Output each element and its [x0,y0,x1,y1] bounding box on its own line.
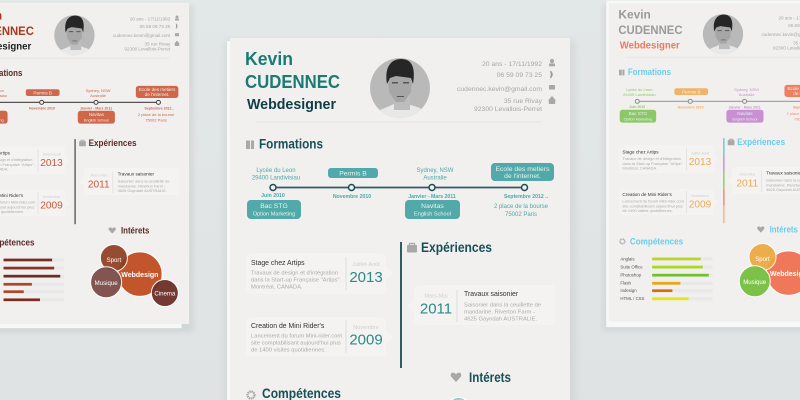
experience card: Mini Rider's: de 1400 visites quotidiennes. [622,208,673,213]
experience card: Stage chez Artips: 2013 [40,158,63,169]
experience card: Stage chez Artips: 2013 [349,269,383,286]
heading: Compétences: Compétences [630,236,683,247]
heading: Formations: Formations [628,67,671,78]
experience card: Stage chez Artips: Montréal, CANADA. [622,166,657,171]
experience card: Travaux saisonier: mandarine. Riverton Farm - [464,310,535,316]
heading: Intérets: Intérets [469,369,511,385]
portrait photo [370,58,430,120]
experience card: Travaux saisonier: Saisonier dans la ceuillette de [118,179,170,184]
contact details: 92300 Levallois-Perret [124,47,171,52]
skill bars: Flash [620,281,632,286]
timeline: 2 place de la bourse [494,204,549,210]
heading: Intérets [757,225,798,236]
experience card: Travaux saisonier: 4625 Gayndah AUSTRALIE. [118,188,167,193]
experience card: Stage chez Artips: Juillet-Août [691,151,710,155]
timeline: 75002 Paris [145,118,167,123]
experience card: Mini Rider's: Creation de Mini Rider's [251,323,325,330]
timeline: Novembre 2010 [29,106,55,110]
experience card: Stage chez Artips: dans la Start-up Française "Artips". [251,278,342,284]
experience card: Travaux saisonier: 4625 Gayndah AUSTRALIE. [464,316,538,322]
experience card: Mini Rider's: Novembre [691,194,709,198]
skill bars: Photoshop [620,273,642,278]
timeline: Juin 2010 [629,105,645,109]
experience card: Stage chez Artips: Travaux de design et d'intégration [251,270,338,276]
vertical divider [74,139,76,224]
timeline: Ecole des metiers [139,87,176,92]
contact details: cudennec.kevin@gmail.com [457,86,542,93]
skill bars: Suite Office [620,264,643,269]
timeline: Sydney, NSW [86,88,111,93]
heading: Formations: Formations [259,136,323,152]
contact details: 20 ans - 17/11/1992 [482,61,542,68]
timeline: Permis B [33,90,52,95]
interests bubble chart: Cinema [154,292,176,298]
name heading [618,8,683,51]
experience card: Stage chez Artips [0,147,70,174]
contact details: 35 rue Rivay [145,41,171,46]
interests bubble chart: Webdesign [121,270,159,279]
timeline: Janvier - Mars 2011 [408,194,456,200]
vertical divider [400,242,402,368]
name heading: Webdesigner [247,96,336,113]
panel: right CV in multicolour theme [603,0,800,331]
experience card: Travaux saisonier: 2011 [736,178,759,189]
timeline: English School [414,212,451,218]
experience card: Mini Rider's: Novembre [353,325,379,331]
timeline: Navitas [89,112,105,117]
skill bars: HTML / CSS [620,296,645,301]
interests bubble chart [91,244,178,307]
interests bubble chart: Sport [107,258,121,264]
timeline: 2 place de la bourse [138,112,175,117]
interests bubble chart: Musique [743,280,767,286]
experience card: Stage chez Artips: Juillet-Août [352,262,380,268]
name heading [0,9,34,52]
experience card: Travaux saisonier [79,168,179,195]
experience card: Stage chez Artips [246,253,394,294]
experience card: Stage chez Artips: Montréal, CANADA. [251,284,303,290]
heading: Intérets: Intérets [121,226,149,237]
name heading: Kevin [245,49,293,69]
timeline: Option Marketing [253,212,295,218]
experience card: Travaux saisonier: 2011 [420,300,452,318]
interests bubble chart [739,243,800,297]
timeline: Ecole des metiers [495,166,550,173]
timeline: Sydney, NSW [734,87,759,92]
panel: centre CV in teal theme [224,38,576,400]
experience card: Mini Rider's: Novembre [43,195,60,199]
skill bars: Anglais [620,256,635,261]
timeline: Lycée du Leon [256,168,296,174]
experience card: Mini Rider's: 2009 [40,200,63,211]
skill bars [0,257,64,302]
timeline: Lycée du Leon [626,87,653,92]
skill bars: Indesign [620,288,637,293]
timeline: de l'internet. [145,92,169,97]
experience card: Mini Rider's: site comptabilisant aujourd'hui plus [251,340,341,346]
multicolour vertical divider [723,138,725,223]
portrait photo [54,15,95,57]
timeline: Australie [739,92,755,97]
timeline: Sydney, NSW [417,168,454,174]
experience card: Travaux saisonier: Mars-Mai [424,294,448,300]
timeline: Septembre 2012 .. [504,194,549,200]
experience card: Mini Rider's [619,189,719,215]
timeline: Septembre 2012 .. [145,106,174,110]
timeline [247,163,554,219]
experience card: Stage chez Artips: Juillet-Août [42,152,62,156]
experience card: Travaux saisonier: Travaux saisonier [464,291,519,298]
experience card: Stage chez Artips: Stage chez Artips [622,150,659,155]
timeline: Australie [423,176,447,182]
experience card: Travaux saisonier: Mars-Mai [739,173,755,177]
experience card: Travaux saisonier: 2011 [88,179,110,190]
timeline: Permis B [682,89,701,94]
heading: Expériences: Expériences [89,138,136,149]
experience card: Mini Rider's: site comptabilisant aujourd'hui plus [622,203,683,208]
contact details [457,59,556,113]
contact details: cudennec.kevin@gmail.com [113,33,170,38]
timeline: Juin 2010 [261,193,285,199]
timeline: 29400 Landivisiau [623,92,656,97]
experience card: Mini Rider's: de 1400 visites quotidiennes. [251,348,326,354]
heading: Intérets [109,226,149,237]
skill bars [620,256,713,301]
experience card: Mini Rider's: Lancement du forum Mini-rider.com [251,334,342,340]
panel: left CV in red theme [0,3,193,332]
experience card: Travaux saisonier [728,167,800,194]
experience card: Stage chez Artips: 2013 [689,157,712,168]
timeline: 29400 Landivisiau [252,176,300,182]
timeline: Novembre 2010 [333,194,371,200]
timeline: Janvier - Mars 2011 [729,105,761,109]
timeline: Janvier - Mars 2011 [80,106,112,110]
experience card: Stage chez Artips [619,146,719,173]
experience card: Mini Rider's: 2009 [349,332,383,348]
experience card: Travaux saisonier: Mars-Mai [91,174,107,178]
timeline: Option Marketing [624,117,652,121]
experience card: Stage chez Artips: dans la Start-up Française "Artips". [622,161,683,166]
contact details [113,15,179,52]
name heading: Webdesigner [620,40,680,51]
timeline: English School [732,117,758,121]
timeline: English School [84,118,109,122]
interests bubble (top edge visible) [450,398,467,400]
timeline: Permis B [339,170,367,178]
interests bubble chart: Sport [755,257,770,263]
contact details: 06 59 09 73 25 [497,72,542,79]
experience card: Mini Rider's: 2009 [689,199,712,210]
name heading [245,49,340,113]
timeline: Navitas [421,203,444,210]
timeline: de l'internet. [504,173,541,180]
name heading: CUDENNEC [245,72,340,92]
experience card: Travaux saisonier: Travaux saisonier [118,172,155,177]
heading: Intérets [451,369,511,385]
timeline: Bac STG [629,111,648,116]
experience card: Mini Rider's: Creation de Mini Rider's [622,192,672,197]
timeline [620,85,800,123]
contact details: 20 ans - 17/11/1992 [130,16,171,21]
timeline: Bac STG [260,203,288,210]
name heading: Kevin [618,8,651,22]
experience card: Mini Rider's [0,190,70,216]
timeline [0,86,178,124]
experience card: Travaux saisonier: Saisonier dans la ceuillette de [464,302,541,308]
experience card: Travaux saisonier: mandarine. Riverton Farm - [118,183,166,188]
timeline: Australie [90,93,107,98]
contact details: 06 59 09 73 25 [140,24,171,29]
heading: Expériences: Expériences [421,239,492,255]
experience card: Stage chez Artips: Stage chez Artips [251,260,305,267]
experience card: Mini Rider's: Lancement du forum Mini-rider.com [622,199,684,204]
heading: Expériences: Expériences [737,137,785,148]
experience card: Travaux saisonier [407,285,555,325]
contact details: 35 rue Rivay [504,98,543,105]
contact details [761,15,800,51]
name heading: CUDENNEC [618,23,683,37]
timeline: Novembre 2010 [678,105,704,109]
timeline: 75002 Paris [505,212,537,218]
interests bubble chart: Musique [95,281,118,287]
experience card: Mini Rider's [246,317,394,356]
portrait photo [703,14,743,56]
experience card: Stage chez Artips: Travaux de design et d'intégration [622,156,681,161]
contact details: 92300 Levallois-Perret [474,106,542,113]
timeline: Navitas [737,111,753,116]
